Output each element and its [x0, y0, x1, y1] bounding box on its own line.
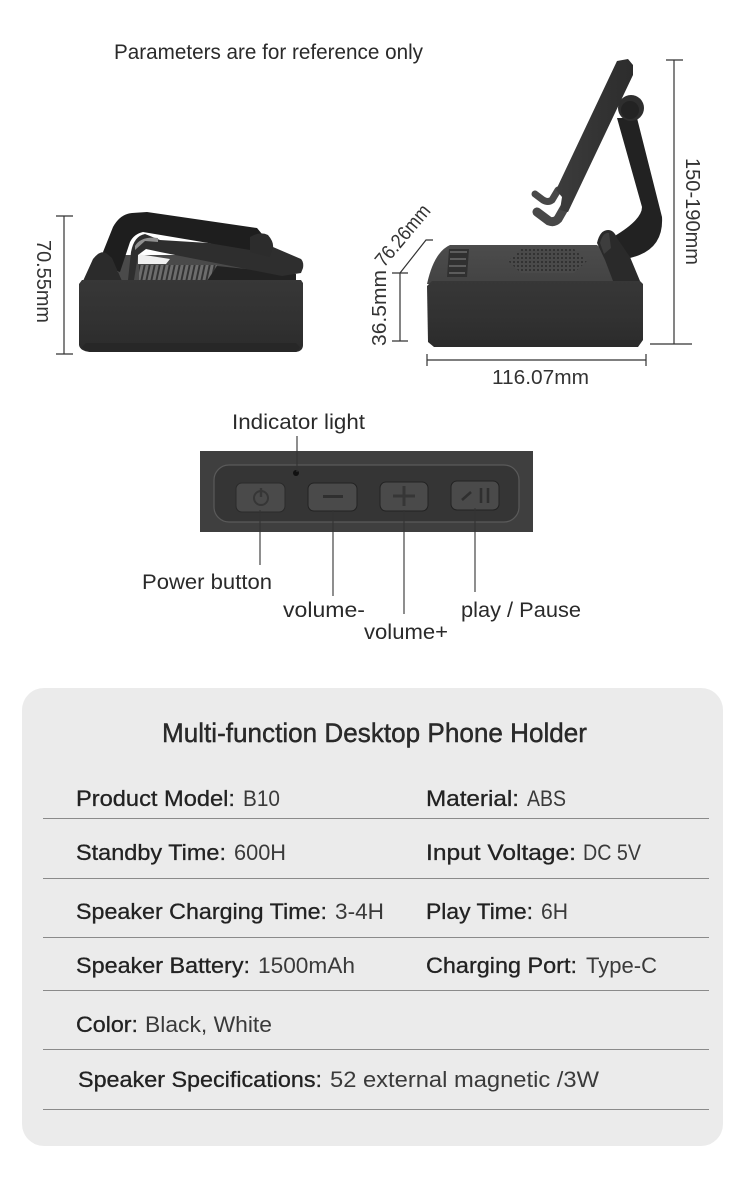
spec: input voltage: Input Voltage:: [426, 840, 576, 865]
spec: color: Black, White: [145, 1012, 272, 1037]
spec: charging port: Charging Port:: [426, 953, 577, 978]
callout lines: [260, 436, 475, 614]
base body: [79, 280, 303, 352]
label: play / pause: play / Pause: [461, 599, 581, 622]
phone hooks: [535, 190, 558, 202]
light gap under plate: [138, 254, 170, 264]
play pause button: [451, 481, 499, 510]
label: volume plus: volume+: [364, 621, 448, 644]
speaker mesh: [508, 249, 587, 273]
spec: speaker specifications: Speaker Specifications:: [78, 1067, 322, 1092]
hinge top: [618, 95, 644, 121]
spec: color: [76, 1012, 272, 1037]
label: indicator light: Indicator light: [232, 411, 365, 434]
label: volume minus: volume-: [283, 599, 365, 622]
dimension: 116.07mm: 116.07mm: [492, 367, 589, 389]
button close-up with callouts: [142, 411, 581, 644]
top buttons: [447, 249, 469, 277]
spec: speaker battery: Speaker Battery:: [76, 953, 250, 978]
spec: speaker specifications: 52 external magnetic /3W: [330, 1067, 599, 1092]
base hinge: [83, 252, 122, 281]
base hinge: [597, 230, 640, 281]
plate: [128, 234, 303, 280]
row dividers: [43, 818, 709, 1110]
device: unfolded speaker stand: [427, 59, 662, 347]
spec: play time: 6H: [541, 899, 568, 924]
button panel: [200, 451, 533, 532]
dimension: 70.55mm: [32, 216, 73, 354]
indicator dot: [293, 470, 299, 476]
dimension: 116.07mm: [427, 354, 646, 389]
spec: standby time: 600H: [234, 840, 286, 865]
spec: speaker battery: [76, 953, 355, 978]
spec: speaker charging time: 3-4H: [335, 899, 384, 924]
top hinge: [250, 233, 273, 257]
dimension: 70.55mm: 70.55mm: [32, 240, 54, 323]
spec: input voltage: DC 5V: [583, 840, 641, 865]
spec: speaker specifications: [78, 1067, 599, 1092]
specs heading: Multi-function Desktop Phone Holder: [162, 718, 587, 748]
speaker grill: [139, 265, 217, 281]
power button: [236, 483, 285, 512]
device: folded speaker stand: [79, 212, 303, 352]
dimension: 76.26mm: 76.26mm: [371, 200, 435, 271]
note: parameters for reference: Parameters are for reference only: [114, 41, 423, 64]
volume plus button: [380, 482, 428, 511]
spec: color: Color:: [76, 1012, 138, 1037]
folded holder side view with height dimension: [32, 212, 303, 354]
dimension: 150-190mm: [650, 60, 703, 344]
phone plate: [556, 59, 633, 212]
dimension: 36.5mm: [369, 270, 408, 346]
spec: speaker battery: 1500mAh: [258, 953, 355, 978]
spec: product model: Product Model:: [76, 786, 235, 811]
label: power button: Power button: [142, 571, 272, 594]
spec: standby time: [76, 840, 286, 865]
spec: material: Material:: [426, 786, 519, 811]
rear arm: [606, 118, 662, 262]
top face of base: [427, 245, 641, 284]
spec: charging port: [426, 953, 657, 978]
dimension: 36.5mm: 36.5mm: [369, 270, 391, 346]
spec: product model: B10: [243, 786, 280, 811]
unfolded holder view with dimensions: [369, 59, 703, 389]
dimension: 150-190mm: 150-190mm: [681, 158, 703, 265]
speaker top surface: [118, 255, 296, 281]
spec: play time: Play Time:: [426, 899, 533, 924]
spec: material: [426, 786, 566, 811]
spec: material: ABS: [527, 786, 566, 811]
spec: speaker charging time: Speaker Charging Time:: [76, 899, 327, 924]
spec: input voltage: [426, 840, 641, 865]
panel: specifications: [22, 688, 723, 1146]
arm: [103, 212, 262, 272]
front of base: [427, 281, 643, 347]
spec: charging port: Type-C: [586, 953, 657, 978]
volume minus button: [308, 483, 357, 511]
spec: standby time: Standby Time:: [76, 840, 226, 865]
